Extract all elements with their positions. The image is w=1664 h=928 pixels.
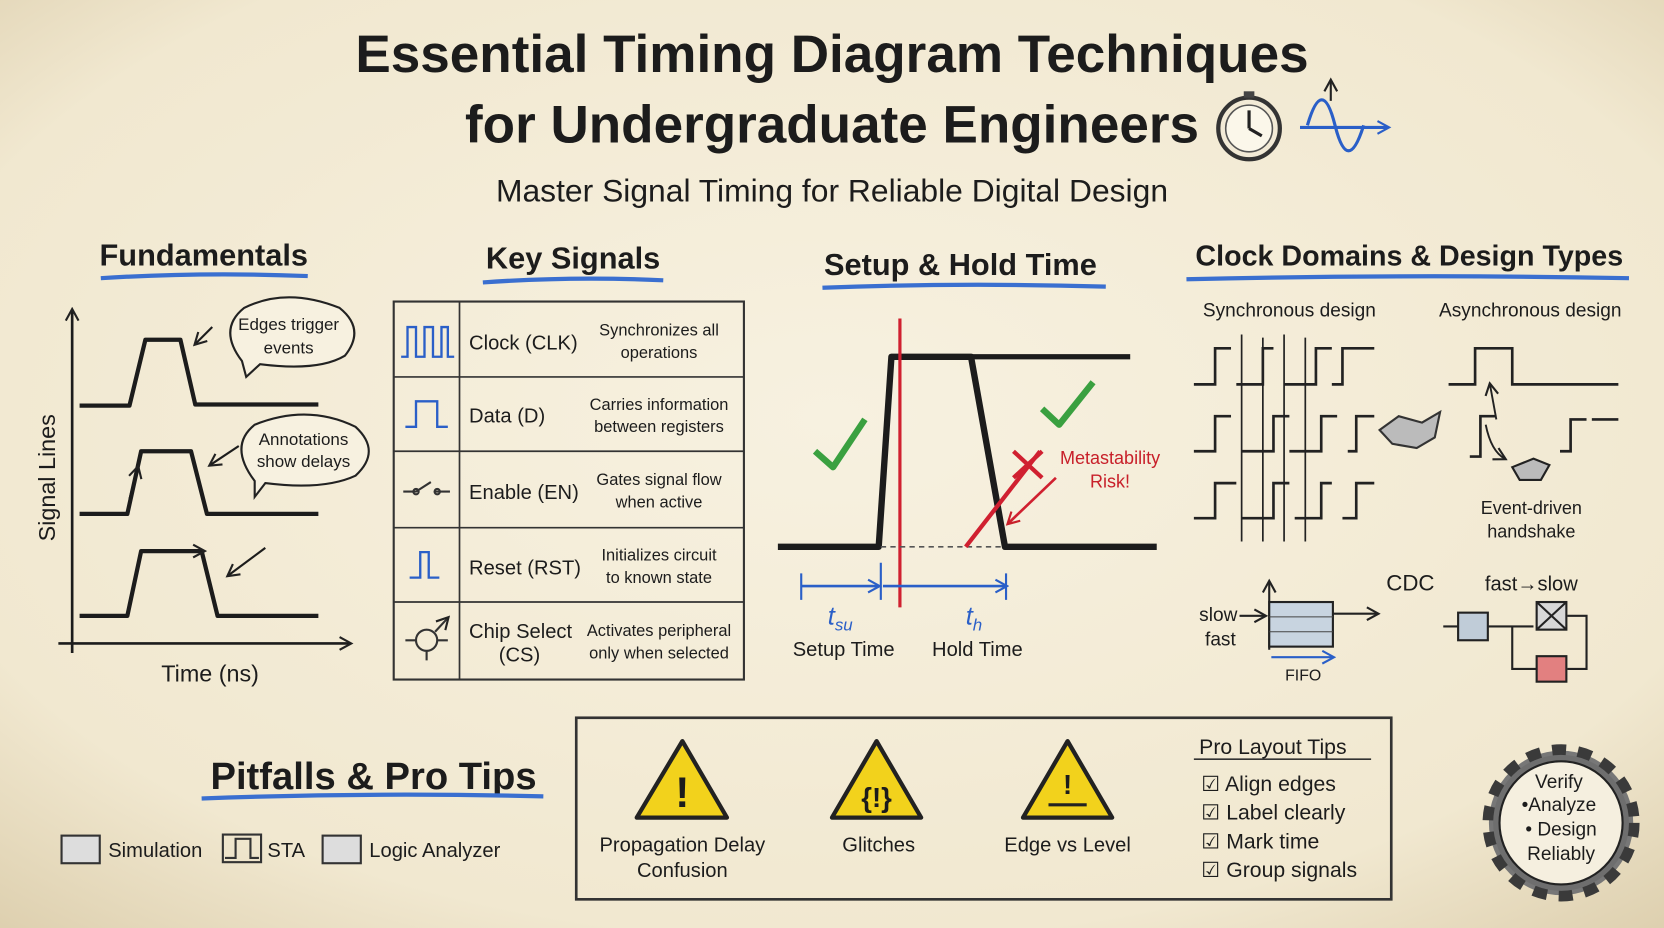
icon: gear badge: •Analyze	[1522, 795, 1596, 816]
icon: warning edge	[1023, 741, 1112, 818]
icon: waveform	[1300, 81, 1388, 151]
diagram: fifo: FIFO	[1285, 668, 1321, 685]
panel: clock domains	[1186, 240, 1629, 685]
list: pro layout tips: Pro Layout Tips	[1199, 736, 1347, 759]
table: signals: operations	[621, 344, 697, 362]
panel: pitfalls box: Confusion	[637, 860, 728, 882]
table: signals: Enable (EN)	[469, 482, 579, 504]
heading: pitfalls: Pitfalls & Pro Tips	[210, 755, 537, 798]
list: pro layout tips: ☑ Align edges	[1201, 773, 1336, 796]
panel: pitfalls box: Glitches	[842, 835, 915, 857]
axis label: time: Time (ns)	[161, 661, 259, 687]
panel: clock domains: CDC	[1386, 570, 1435, 595]
list: pro layout tips: ☑ Group signals	[1201, 859, 1357, 882]
diagram: fifo: fast	[1205, 630, 1236, 651]
heading: clock domains: Clock Domains & Design Types	[1195, 240, 1623, 272]
icon: gear badge	[1489, 751, 1633, 895]
icon: warning edge: !	[1063, 769, 1072, 800]
callout: annotations: show delays	[257, 452, 350, 471]
icon: handshake	[1380, 412, 1440, 448]
title: Essential Timing Diagram Techniques	[355, 25, 1309, 84]
panel: pitfalls box: Edge vs Level	[1004, 835, 1131, 857]
callout: annotations: Annotations	[259, 430, 348, 449]
icon: stopwatch	[1218, 91, 1280, 159]
tools row: STA	[267, 840, 306, 862]
panel: clock domains: Asynchronous design	[1439, 300, 1622, 321]
table: signals: Gates signal flow	[596, 471, 722, 489]
callout: annotations	[241, 415, 369, 497]
table: signals: (CS)	[499, 644, 540, 666]
table: signals: Data (D)	[469, 406, 545, 428]
table: signals: to known state	[606, 569, 712, 587]
icon: warning propagation: !	[675, 769, 689, 816]
list: pro layout tips: ☑ Label clearly	[1201, 802, 1346, 825]
label: metastability: Metastability	[1060, 448, 1160, 468]
panel: pitfalls box	[576, 718, 1391, 899]
table: signals: Clock (CLK)	[469, 332, 578, 354]
label: tsu	[793, 602, 895, 661]
panel: clock domains: Synchronous design	[1203, 300, 1376, 321]
axis label: signal lines: Signal Lines	[34, 414, 60, 541]
list: pro layout tips	[1194, 736, 1371, 882]
tools row: Simulation	[108, 840, 202, 862]
chart: signal lines	[58, 310, 350, 653]
icon: gear badge: Reliably	[1527, 844, 1595, 865]
label: tsu: t	[828, 602, 835, 630]
label: th: h	[973, 616, 982, 635]
table: signals: only when selected	[589, 644, 729, 662]
label: th: t	[966, 602, 973, 630]
panel: clock domains: Event-driven	[1481, 498, 1582, 518]
tools row: Logic Analyzer	[369, 840, 501, 862]
table: signals: Reset (RST)	[469, 557, 581, 579]
icon: warning propagation	[637, 741, 727, 818]
table: signals: when active	[615, 494, 702, 512]
callout: edges trigger: events	[264, 339, 314, 358]
label: metastability: Risk!	[1090, 471, 1130, 491]
heading: setup hold: Setup & Hold Time	[824, 247, 1097, 282]
panel: fundamentals	[34, 237, 369, 687]
table: signals: Synchronizes all	[599, 322, 719, 340]
label: tsu: Setup Time	[793, 639, 895, 661]
callout: edges trigger	[230, 297, 354, 377]
panel: setup & hold	[778, 247, 1160, 661]
tools row	[62, 835, 501, 863]
panel: key signals	[394, 241, 744, 680]
diagram: asynchronous	[1449, 348, 1618, 480]
icon: gear badge: Verify	[1535, 772, 1583, 793]
table: signals: Carries information	[590, 396, 728, 414]
diagram: synchronous	[1194, 334, 1374, 542]
label: tsu: su	[835, 616, 853, 635]
icon: warning glitches	[832, 741, 921, 818]
diagram: fast to slow	[1443, 602, 1587, 682]
chart: setup hold waveform	[778, 319, 1157, 607]
label: th: Hold Time	[932, 639, 1023, 661]
diagram: fifo: slow	[1199, 605, 1238, 626]
table: signals	[394, 302, 744, 680]
callout: edges trigger: Edges trigger	[238, 315, 339, 334]
table: signals: Chip Select	[469, 621, 573, 643]
label: metastability	[1060, 448, 1160, 491]
label: th	[932, 602, 1023, 661]
panel: clock domains: handshake	[1487, 521, 1575, 541]
table: signals: Activates peripheral	[587, 622, 731, 640]
diagram: fifo	[1199, 582, 1377, 685]
heading: key signals: Key Signals	[486, 241, 660, 276]
panel: clock domains: fast→slow	[1485, 573, 1578, 595]
panel: pitfalls box: Propagation Delay	[599, 835, 766, 857]
subtitle: Master Signal Timing for Reliable Digital Design	[496, 173, 1168, 209]
title	[355, 25, 1309, 154]
list: pro layout tips: ☑ Mark time	[1201, 830, 1319, 853]
table: signals: between registers	[594, 418, 724, 436]
icon: gear badge: • Design	[1525, 820, 1597, 841]
title: for Undergraduate Engineers	[465, 95, 1199, 154]
table: signals: Initializes circuit	[601, 547, 717, 565]
heading: fundamentals: Fundamentals	[100, 237, 308, 272]
icon: warning glitches: {!}	[861, 782, 892, 813]
